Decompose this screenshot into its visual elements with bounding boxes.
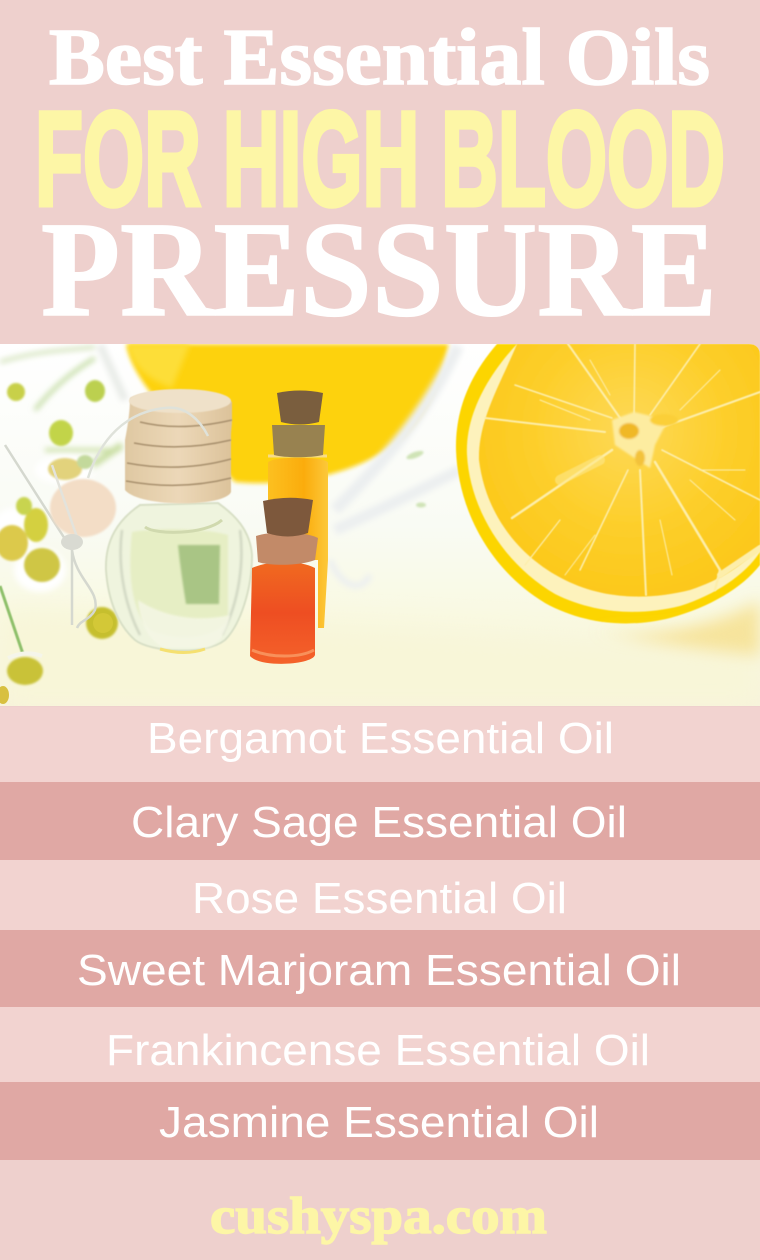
title (35, 14, 725, 345)
glass bottle with wooden cap (5, 389, 252, 652)
red vial (250, 498, 318, 664)
band: Bergamot (0, 707, 760, 782)
band: Clary Sage: Clary Sage Essential Oil (131, 798, 627, 847)
lemon slice (456, 344, 760, 623)
glass body (106, 503, 252, 651)
band: Rose (0, 860, 760, 930)
band: Frankincense: Frankincense Essential Oil (106, 1026, 650, 1075)
glass dish behind (330, 346, 460, 586)
heading line: Best Essential Oils: Best Essential Oils (49, 14, 710, 102)
lemon flesh (479, 344, 760, 597)
back lemon (127, 344, 449, 483)
yellow vial (268, 390, 328, 628)
chamomile flowers (0, 380, 118, 704)
band: Sweet Marjoram: Sweet Marjoram Essential Oil (77, 946, 681, 995)
lemon segment membranes (485, 344, 760, 595)
table shading (18, 623, 356, 646)
band: Sweet Marjoram (0, 930, 760, 1007)
lemon pith (467, 344, 760, 612)
green label (178, 545, 220, 604)
wooden bead (50, 479, 116, 537)
list of oils (0, 707, 760, 1160)
band: Bergamot: Bergamot Essential Oil (147, 714, 614, 763)
band: Jasmine: Jasmine Essential Oil (159, 1098, 599, 1147)
band: Rose: Rose Essential Oil (192, 874, 567, 923)
glass facets (121, 530, 241, 635)
photo: essential oil bottles and lemons (0, 344, 760, 706)
lemon rind (456, 344, 760, 623)
band: Frankincense (0, 1007, 760, 1082)
footer website: cushyspa.com (210, 1188, 547, 1245)
wooden cap (125, 391, 232, 503)
string (88, 408, 208, 478)
background foliage (0, 345, 125, 470)
band: Jasmine (0, 1082, 760, 1160)
lemon centre (612, 412, 678, 468)
corks (272, 425, 325, 457)
lemon shadow (590, 600, 760, 655)
band: Clary Sage (0, 782, 760, 860)
heading line: PRESSURE: PRESSURE (41, 195, 717, 345)
